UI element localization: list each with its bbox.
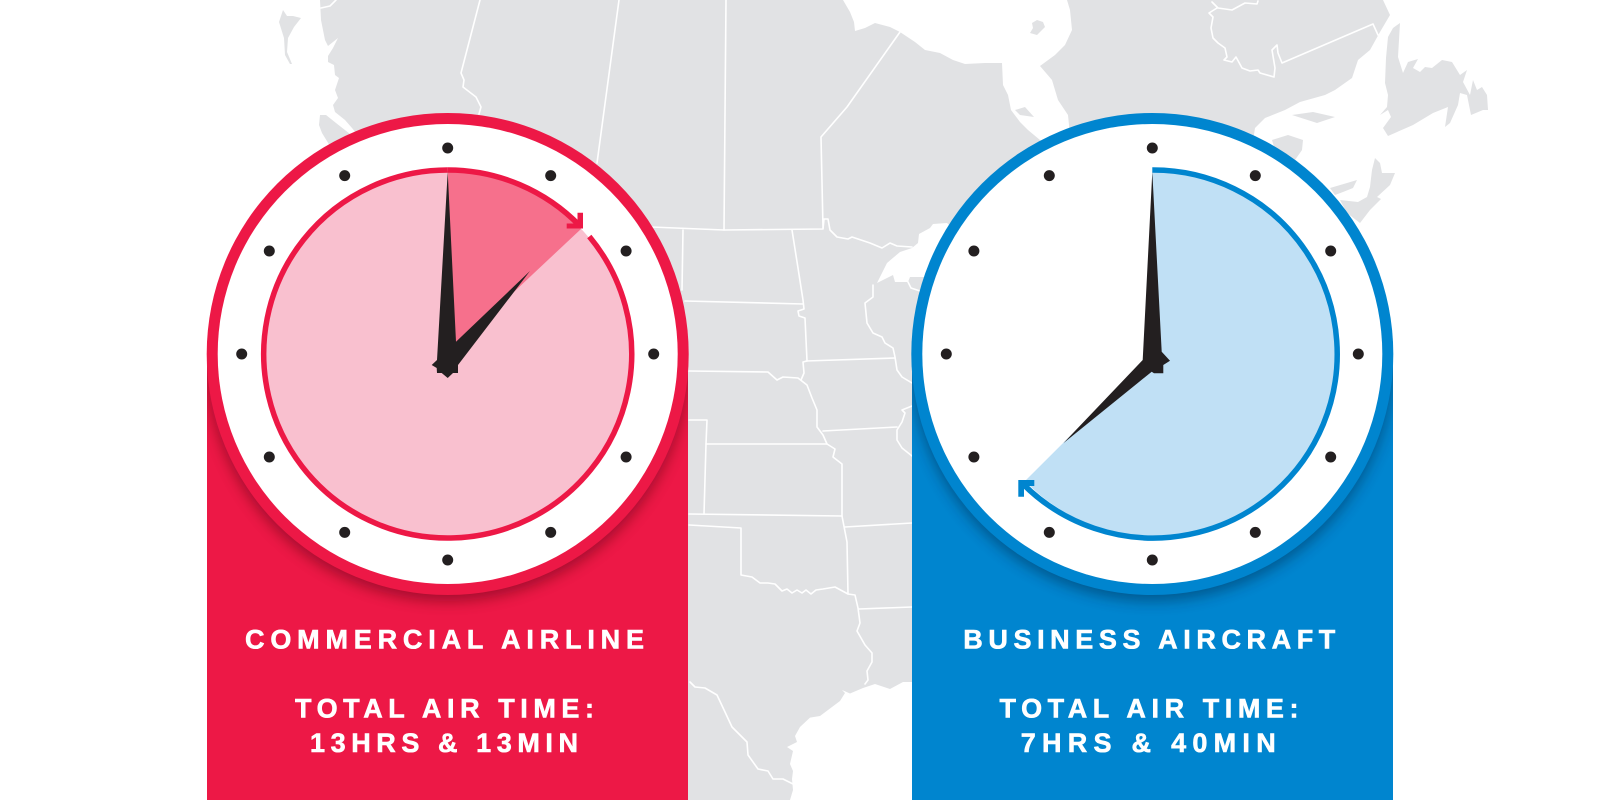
Vancouver Island — [279, 10, 301, 64]
hour dots — [236, 142, 659, 566]
label: 13hrs and 13min: 13HRS & 13MIN — [310, 728, 578, 758]
clock rim — [911, 113, 1393, 595]
mainland landmass — [320, 0, 1390, 800]
label: business aircraft: BUSINESS AIRCRAFT — [963, 625, 1336, 655]
clock rim — [207, 113, 689, 595]
elapsed arc with arrow — [448, 170, 583, 228]
label: 7hrs and 40min: 7HRS & 40MIN — [1021, 728, 1276, 758]
Hudson Bay island — [1030, 20, 1045, 35]
panel: business aircraft — [911, 113, 1393, 800]
elapsed arc with arrow — [1018, 170, 1337, 538]
province and state borders — [321, 0, 1378, 784]
Olympic Peninsula — [319, 115, 352, 146]
label: total air time: TOTAL AIR TIME: — [1000, 694, 1298, 724]
pale dial fill — [265, 171, 631, 537]
clock: business aircraft — [911, 113, 1393, 595]
clock face — [218, 124, 678, 584]
clock face — [922, 124, 1382, 584]
Newfoundland — [1380, 23, 1488, 136]
Akimiski Island — [1015, 107, 1034, 117]
panel: commercial airline — [207, 113, 689, 800]
Anticosti Island — [1292, 112, 1335, 123]
background map of North America — [279, 0, 1488, 800]
clock hands — [1063, 172, 1170, 443]
Nova Scotia — [1340, 158, 1395, 223]
panel background — [912, 354, 1393, 800]
Prince Edward Island — [1330, 180, 1357, 195]
clock hands — [432, 172, 530, 378]
elapsed wedge — [1025, 171, 1340, 537]
remaining arc — [264, 170, 632, 538]
clock shadow — [207, 368, 688, 609]
elapsed wedge — [448, 171, 581, 354]
clock shadow — [912, 368, 1393, 608]
hour dots — [941, 142, 1364, 566]
Great Lakes water — [877, 223, 960, 283]
Gaspe peninsula — [1272, 135, 1303, 160]
label: total air time: TOTAL AIR TIME: — [295, 694, 594, 724]
label: commercial airline: COMMERCIAL AIRLINE — [245, 625, 644, 655]
clock: commercial airline — [207, 113, 689, 595]
panel background — [207, 354, 688, 800]
